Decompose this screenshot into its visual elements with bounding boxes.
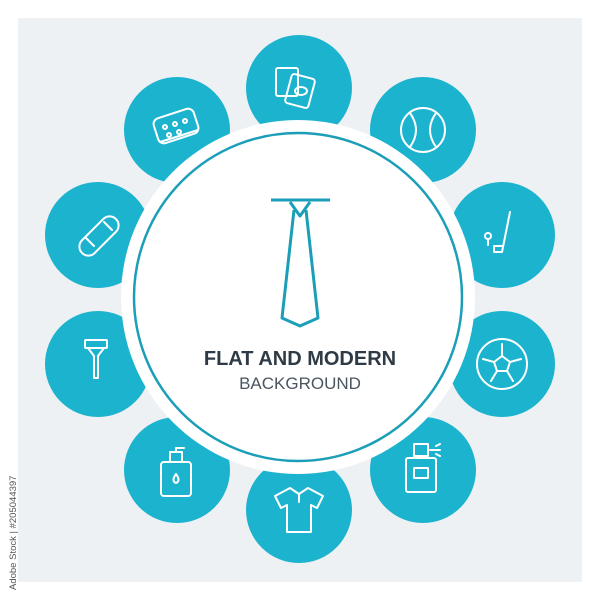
icon: golf (485, 212, 510, 252)
icon: tie (271, 200, 330, 326)
icon: shirt (275, 488, 323, 532)
circle: perfume (370, 417, 476, 523)
icon: skateboard (76, 213, 122, 259)
title: FLAT AND MODERN (204, 348, 396, 370)
circle: golf (449, 182, 555, 288)
icon: soccer (477, 339, 527, 389)
icon: sponge (152, 107, 200, 145)
center circle (121, 120, 475, 474)
watermark id: Adobe Stock | #205044397 (8, 476, 19, 590)
circle: sponge (124, 77, 230, 183)
subtitle: BACKGROUND (239, 374, 361, 393)
icon: perfume (406, 444, 440, 492)
icon: dispenser (161, 448, 191, 496)
circle: dispenser (124, 417, 230, 523)
circle: baseball (370, 77, 476, 183)
circle: soap (246, 35, 352, 141)
circle: skateboard (45, 182, 151, 288)
circle: razor (45, 311, 151, 417)
icon: soap (276, 68, 315, 109)
icon: baseball (401, 108, 445, 152)
circle: shirt (246, 457, 352, 563)
icon: razor (85, 340, 107, 378)
circle: soccer (449, 311, 555, 417)
